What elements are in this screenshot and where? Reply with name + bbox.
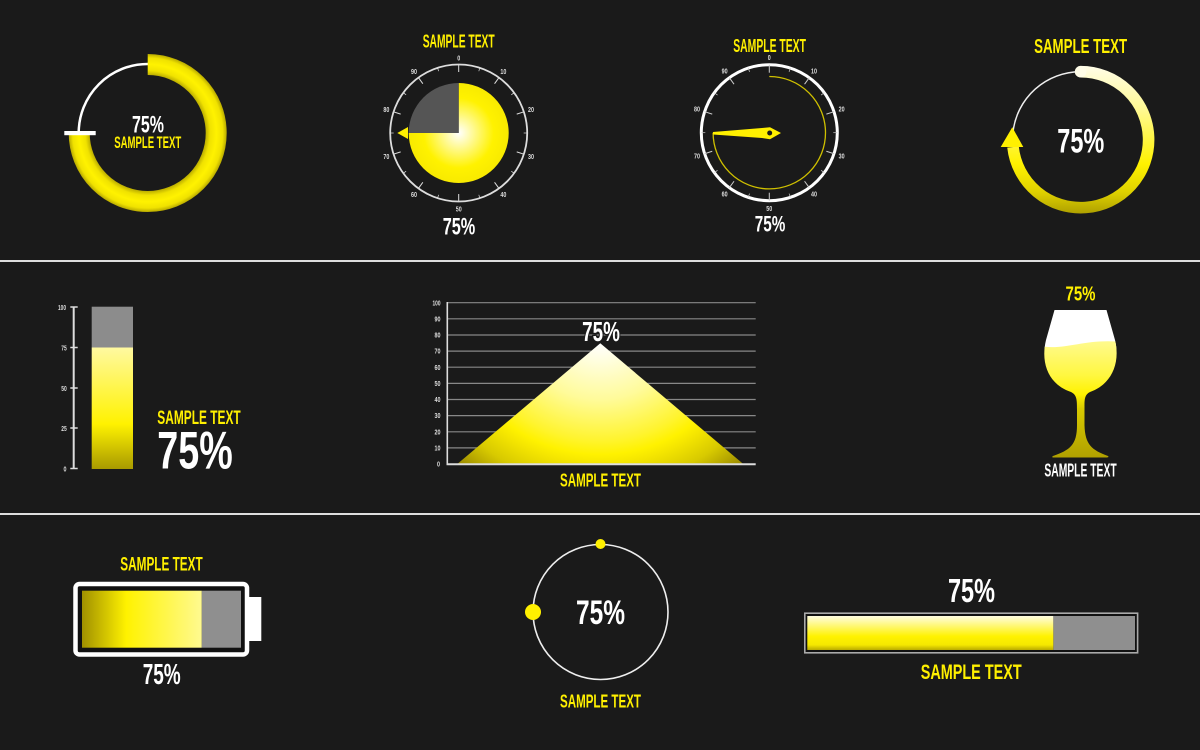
triangle area chart: 10 bbox=[434, 446, 441, 452]
triangle area chart: 20 bbox=[434, 429, 441, 436]
triangle area chart: 60 bbox=[434, 365, 441, 372]
gauge: dial with needle: 75% bbox=[755, 212, 785, 236]
gauge: dial with pie: 20 bbox=[528, 107, 534, 114]
gauge: dial with needle: 10 bbox=[811, 69, 817, 76]
gauge: dial with pie: 10 bbox=[500, 69, 506, 76]
triangle area chart: SAMPLE TEXT bbox=[560, 470, 641, 490]
gauge: circular arrow: SAMPLE TEXT bbox=[1034, 36, 1127, 58]
gauge: dial with needle: 90 bbox=[722, 69, 728, 76]
gauge: dial with pie: 80 bbox=[383, 107, 389, 114]
triangle area chart: 75% bbox=[582, 316, 620, 347]
circle with dots: 75% bbox=[576, 594, 625, 632]
circle with dots bbox=[525, 539, 668, 712]
gauge: circular arrow: 75% bbox=[1057, 122, 1104, 160]
gauge: dial with pie: 40 bbox=[500, 192, 506, 199]
battery bbox=[76, 554, 261, 691]
thermometer bar with scale: 0 bbox=[64, 466, 67, 474]
triangle area chart bbox=[432, 300, 756, 490]
gauge: dial with needle: 80 bbox=[694, 107, 700, 114]
gauge: dial with pie: 50 bbox=[456, 206, 462, 214]
gauge: dial with pie: 0 bbox=[457, 56, 460, 62]
gauge: dial with needle: 60 bbox=[722, 192, 728, 199]
triangle area chart: 80 bbox=[434, 333, 441, 340]
thermometer bar with scale: SAMPLE TEXT bbox=[157, 407, 241, 429]
gauge: dial with pie bbox=[383, 32, 534, 240]
triangle area chart: 90 bbox=[434, 316, 441, 323]
horizontal progress bar bbox=[805, 572, 1138, 684]
gauge: dial with needle: 30 bbox=[839, 154, 845, 161]
gauge: dial with needle bbox=[694, 36, 845, 236]
triangle area chart: 30 bbox=[434, 413, 441, 420]
wine glass: 75% bbox=[1066, 284, 1096, 306]
gauge: dial with pie: 90 bbox=[411, 69, 417, 76]
gauge: dial with needle: 20 bbox=[839, 107, 845, 114]
thermometer bar with scale: 75% bbox=[157, 421, 233, 480]
triangle area chart: 50 bbox=[434, 381, 441, 388]
gauge: dial with pie: 60 bbox=[411, 192, 417, 199]
horizontal progress bar: SAMPLE TEXT bbox=[921, 661, 1022, 684]
gauge: circular arrow bbox=[1001, 36, 1149, 208]
gauge: thick donut ring: 75% bbox=[132, 112, 164, 139]
gauge: dial with pie: 30 bbox=[528, 154, 534, 161]
gauge: thick donut ring: SAMPLE TEXT bbox=[114, 133, 182, 152]
gauge: dial with needle: 40 bbox=[811, 192, 817, 199]
triangle area chart: 70 bbox=[434, 349, 441, 356]
triangle area chart: 0 bbox=[437, 462, 440, 469]
thermometer bar with scale bbox=[58, 305, 241, 480]
triangle area chart: 100 bbox=[432, 300, 441, 307]
gauge: dial with needle: 50 bbox=[766, 206, 772, 213]
thermometer bar with scale: 100 bbox=[58, 305, 66, 312]
battery: SAMPLE TEXT bbox=[120, 554, 203, 576]
wine glass bbox=[1044, 286, 1117, 476]
battery: 75% bbox=[143, 659, 181, 691]
thermometer bar with scale: 25 bbox=[61, 426, 67, 433]
gauge: dial with needle: 70 bbox=[694, 154, 700, 161]
gauge: thick donut ring bbox=[64, 64, 217, 202]
gauge: dial with pie: SAMPLE TEXT bbox=[423, 32, 495, 52]
triangle area chart: 40 bbox=[434, 397, 441, 404]
horizontal progress bar: 75% bbox=[948, 572, 995, 609]
thermometer bar with scale: 75 bbox=[61, 346, 67, 352]
wine glass: SAMPLE TEXT bbox=[1044, 460, 1117, 480]
gauge: dial with pie: 70 bbox=[383, 154, 389, 161]
circle with dots: SAMPLE TEXT bbox=[560, 692, 641, 712]
gauge: dial with pie: 75% bbox=[443, 214, 475, 240]
gauge: dial with needle: 0 bbox=[768, 55, 771, 62]
thermometer bar with scale: 50 bbox=[61, 386, 67, 393]
gauge: dial with needle: SAMPLE TEXT bbox=[733, 36, 806, 56]
